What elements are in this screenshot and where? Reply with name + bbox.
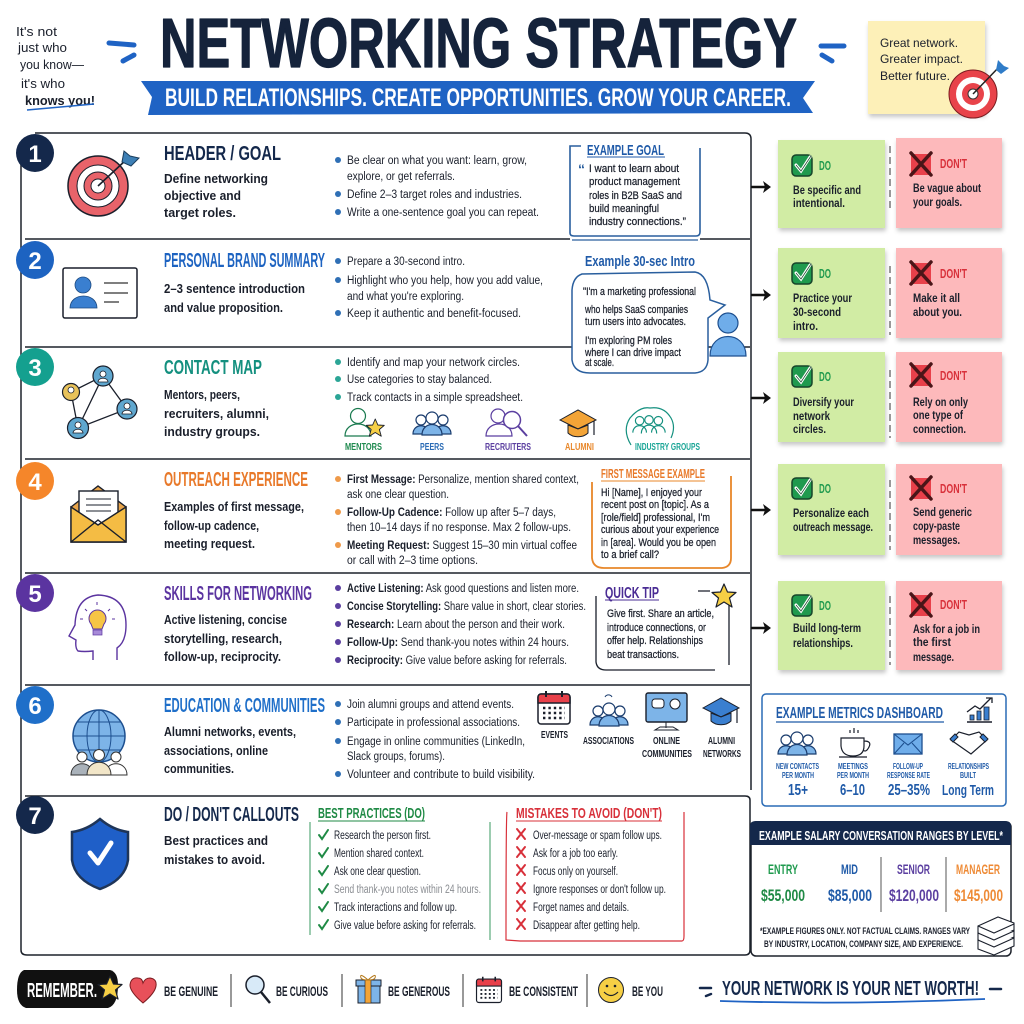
number 5 (16, 574, 54, 612)
do card 1: DO (819, 158, 831, 173)
badge: REMEMBER. (27, 980, 97, 1002)
recruiters (485, 409, 531, 453)
description: storytelling, research, (164, 631, 282, 646)
bullet list: and what you're exploring. (347, 291, 464, 303)
do card 4: Personalize each (793, 508, 869, 520)
icon: shield (72, 819, 128, 889)
metric: new contacts: NEW CONTACTS (776, 762, 819, 771)
bullet list (335, 357, 523, 404)
don't card 4 (896, 464, 1002, 555)
number 6: 6 (28, 693, 42, 720)
description: and value proposition. (164, 300, 283, 315)
icon: network graph (62, 366, 137, 438)
be genuine: BE GENUINE (164, 983, 218, 999)
badge (17, 970, 122, 1008)
panel: 6 education (16, 686, 741, 781)
panel: 7 do dont callouts (16, 796, 684, 941)
industry groups: INDUSTRY GROUPS (635, 442, 700, 453)
do card 3: circles. (793, 424, 826, 436)
mistakes to avoid box: Disappear after getting help. (533, 920, 640, 932)
associations (583, 695, 634, 747)
callout: first message example (592, 466, 731, 568)
mistakes to avoid box: Ask for a job too early. (533, 848, 618, 860)
entry: ENTRY (768, 861, 798, 877)
panel: 4 outreach (16, 462, 731, 568)
best practices list: Ask one clear question. (334, 866, 421, 878)
online communities: ONLINE (653, 736, 680, 747)
bullet list: Join alumni groups and attend events. (347, 699, 514, 711)
metric: meetings: PER MONTH (837, 771, 869, 780)
don't card 3: one type of (913, 410, 963, 422)
senior (889, 861, 939, 905)
callout: quick tip: QUICK TIP (605, 585, 659, 602)
senior: SENIOR (897, 861, 930, 877)
panel: salary ranges (750, 821, 1014, 956)
side note: who knows you (16, 24, 95, 110)
callout: example intro: Example 30-sec Intro (585, 253, 695, 270)
mistakes to avoid box (506, 805, 684, 941)
mid: $85,000 (828, 886, 872, 905)
do card 4: outreach message. (793, 522, 873, 534)
number 1 (16, 134, 54, 172)
description: Best practices and (164, 833, 268, 848)
callout: example goal: industry connections.” (589, 216, 686, 228)
callout: first message example: recent post on [topic]. As a (601, 499, 710, 511)
peers: PEERS (420, 442, 444, 453)
description: mistakes to avoid. (164, 852, 265, 867)
mistakes to avoid box: Ignore responses or don't follow up. (533, 884, 666, 896)
arrows to do and don't cards (752, 146, 890, 665)
be generous (356, 975, 450, 1003)
icon row: community types (538, 691, 741, 760)
description (164, 499, 304, 551)
don't card 5: Ask for a job in (913, 624, 980, 636)
bullet list (335, 155, 539, 219)
sticky note: great network: Better future. (880, 69, 950, 83)
don't card 1: Be vague about (913, 183, 981, 195)
bullet list (335, 256, 543, 320)
do card 3: DO (819, 369, 831, 384)
sticky note: great network: Great network. (880, 36, 958, 50)
subtitle banner (141, 81, 815, 115)
callout: example intro: where I can drive impact (584, 347, 681, 359)
callout: first message example: to a brief call? (601, 549, 659, 561)
callout: first message example: curious about your experience (601, 524, 719, 536)
alumni networks: NETWORKS (703, 749, 741, 760)
sticky note: great network (868, 21, 1009, 118)
callout: example goal: “ (578, 161, 585, 177)
icon: star (712, 584, 736, 607)
be consistent (477, 977, 578, 1002)
heading: PERSONAL BRAND SUMMARY (164, 250, 325, 272)
heading: SKILLS FOR NETWORKING (164, 583, 312, 605)
best practices list: BEST PRACTICES (DO) (318, 805, 425, 822)
description: Define networking (164, 171, 268, 186)
do card 3: Diversify your (793, 397, 854, 409)
description: industry groups. (164, 424, 260, 439)
callout: example goal: product management (589, 176, 680, 188)
metric: meetings (837, 728, 870, 799)
be genuine (130, 978, 218, 1003)
metric: relationships (942, 732, 994, 799)
metric: relationships: Long Term (942, 782, 994, 799)
do card 3 (778, 352, 885, 442)
bullet list: Highlight who you help, how you add value, (347, 275, 543, 287)
metric: follow-up rate (887, 734, 930, 799)
do card 5: relationships. (793, 638, 853, 650)
don't card 2: about you. (913, 307, 962, 319)
callout: example intro: who helps SaaS companies (584, 304, 688, 316)
mistakes to avoid box: Focus only on yourself. (533, 866, 618, 878)
description: communities. (164, 761, 234, 776)
callout: first message example: in [area]. Would you be open (601, 537, 716, 549)
mistakes to avoid box: Forget names and details. (533, 902, 629, 914)
number 7 (16, 796, 54, 834)
number 1: 1 (28, 141, 42, 168)
heading: DO / DON'T CALLOUTS (164, 804, 299, 826)
metric: relationships: RELATIONSHIPS (948, 762, 989, 771)
description: target roles. (164, 205, 236, 220)
description: recruiters, alumni, (164, 406, 269, 421)
bullet list: Follow-Up: Send thank-you notes within 24 hours. (347, 637, 569, 649)
best practices list: Track interactions and follow up. (334, 902, 457, 914)
do card 2: intro. (793, 321, 818, 333)
metric: meetings: 6–10 (840, 782, 865, 799)
do card 2 (778, 248, 885, 338)
bullet list: or call with 2–3 time options. (347, 555, 478, 567)
bullet list: Be clear on what you want: learn, grow, (347, 155, 527, 167)
callout: example intro (572, 253, 746, 373)
do card 2: DO (819, 266, 831, 281)
sticky note: great network: Greater impact. (880, 52, 963, 66)
be generous: BE GENEROUS (388, 983, 450, 999)
recruiters: RECRUITERS (485, 442, 531, 453)
description (164, 724, 296, 776)
do card 1 (778, 140, 885, 228)
description: meeting request. (164, 536, 255, 551)
description: objective and (164, 188, 241, 203)
side note: who knows you: It's not (16, 24, 57, 39)
bullet list (335, 699, 535, 781)
alumni networks (703, 698, 741, 760)
bullet list: Participate in professional associations. (347, 717, 520, 729)
do card 1: Be specific and (793, 185, 861, 197)
description: associations, online (164, 743, 268, 758)
bullet list: Slack groups, forums). (347, 751, 445, 763)
number 5: 5 (28, 581, 42, 608)
callout: example goal: EXAMPLE GOAL (587, 142, 664, 159)
panel: 2 personal brand (16, 241, 746, 373)
mid (828, 861, 872, 905)
be you: BE YOU (632, 983, 663, 999)
bullet list: Research: Learn about the person and their work. (347, 619, 565, 631)
bullet list: Active Listening: Ask good questions and listen more. (347, 583, 579, 595)
bullet list: Engage in online communities (LinkedIn, (347, 736, 525, 748)
be curious (246, 976, 328, 1003)
don't card 5 (896, 581, 1002, 670)
do card 5 (778, 581, 885, 670)
don't card 5: message. (913, 652, 954, 664)
bullet list: Volunteer and contribute to build visibility. (347, 769, 535, 781)
bullet list: Meeting Request: Suggest 15–30 min virtual coffee (347, 540, 577, 552)
do card 4 (778, 464, 885, 555)
don't card 4: Send generic (913, 507, 972, 519)
best practices list: Mention shared context. (334, 848, 424, 860)
don't card 4: copy-paste (913, 521, 960, 533)
icon: cash stack (978, 917, 1014, 955)
bullet list: Reciprocity: Give value before asking for referrals. (347, 655, 567, 667)
mistakes to avoid box: MISTAKES TO AVOID (DON'T) (516, 805, 662, 822)
heading: CONTACT MAP (164, 357, 262, 379)
description (164, 387, 269, 439)
manager (954, 861, 1003, 905)
callout: example intro: turn users into advocates. (585, 316, 686, 328)
do card 4: DO (819, 481, 831, 496)
bullet list: Follow-Up Cadence: Follow up after 5–7 days, (347, 507, 556, 519)
callout: first message example: [role/field] professional, I'm (601, 512, 710, 524)
callout: example goal (570, 142, 700, 240)
don't card 5: the first (913, 637, 951, 649)
be curious: BE CURIOUS (276, 983, 328, 999)
bullet list (335, 474, 579, 567)
bullet list: Use categories to stay balanced. (347, 374, 492, 386)
metric: relationships: BUILT (960, 771, 976, 780)
icon: envelope (71, 486, 126, 542)
be you (598, 978, 663, 1002)
best practices list: Send thank-you notes within 24 hours. (334, 884, 481, 896)
do card 3: network (793, 411, 831, 423)
icon row: contact categories (345, 408, 700, 453)
number 6 (16, 686, 54, 724)
do card 5: DO (819, 598, 831, 613)
metric: follow-up rate: RESPONSE RATE (887, 771, 930, 780)
don't card 1: your goals. (913, 197, 962, 209)
number 4: 4 (28, 469, 42, 496)
bullet list: Prepare a 30-second intro. (347, 256, 465, 268)
callout: example intro: at scale. (585, 357, 614, 369)
callout: quick tip: beat transactions. (607, 649, 679, 661)
bullet list: Define 2–3 target roles and industries. (347, 189, 522, 201)
metric: follow-up rate: FOLLOW-UP (893, 762, 923, 771)
panel: 1 header goal (16, 134, 700, 240)
don't card 3: Rely on only (913, 397, 968, 409)
mentors: MENTORS (345, 442, 382, 453)
industry groups (626, 408, 700, 453)
callout: first message example: FIRST MESSAGE EXAMPLE (601, 466, 705, 481)
icon: growth chart (967, 698, 992, 722)
number 3: 3 (28, 355, 42, 382)
heading: OUTREACH EXPERIENCE (164, 469, 308, 491)
icon: head with bulb (69, 595, 126, 660)
description: Active listening, concise (164, 612, 287, 627)
number 2 (16, 241, 54, 279)
side note: who knows you: just who (17, 40, 67, 55)
callout: quick tip (596, 584, 736, 670)
callout: example goal: build meaningful (589, 203, 659, 215)
do card 2: Practice your (793, 293, 852, 305)
don't card 4: DON'T (940, 481, 967, 496)
footer: remember (17, 970, 663, 1008)
title: NETWORKING STRATEGY (160, 4, 797, 82)
icon: globe with people (71, 710, 127, 775)
bullet list: explore, or get referrals. (347, 171, 455, 183)
associations: ASSOCIATIONS (583, 736, 634, 747)
number 2: 2 (28, 248, 42, 275)
icon: person (710, 313, 746, 356)
description: Alumni networks, events, (164, 724, 296, 739)
description (164, 171, 268, 220)
callout: quick tip: offer help. Relationships (607, 635, 703, 647)
description: Mentors, peers, (164, 387, 240, 402)
header bar (750, 821, 1011, 845)
alumni (560, 410, 596, 453)
panel: step frame (21, 133, 751, 955)
callout: quick tip: Give first. Share an article, (607, 608, 714, 620)
mid: MID (841, 861, 858, 877)
heading: EDUCATION & COMMUNITIES (164, 695, 325, 717)
description: Examples of first message, (164, 499, 304, 514)
bullet list: Concise Storytelling: Share value in short, clear stories. (347, 601, 586, 613)
do card 2: 30-second (793, 307, 841, 319)
online communities (642, 693, 692, 760)
manager: $145,000 (954, 886, 1003, 905)
metric: new contacts (776, 732, 819, 799)
callout: quick tip: introduce connections, or (607, 622, 706, 634)
mistakes to avoid box: Over-message or spam follow ups. (533, 830, 662, 842)
side note: who knows you: it's who (21, 76, 65, 91)
icon: small target (949, 60, 1009, 118)
don't card 2: DON'T (940, 266, 967, 281)
description (164, 833, 268, 867)
events: EVENTS (541, 730, 568, 741)
bullet list: Keep it authentic and benefit-focused. (347, 308, 521, 320)
description (164, 612, 287, 664)
metric: follow-up rate: 25–35% (888, 782, 930, 799)
panel: 5 skills (16, 574, 736, 670)
peers (413, 412, 451, 453)
bullet list: Track contacts in a simple spreadsheet. (347, 392, 523, 404)
entry (761, 861, 805, 905)
description: 2–3 sentence introduction (164, 281, 305, 296)
metric: meetings: MEETINGS (838, 762, 868, 771)
mentors (345, 408, 384, 453)
icon: id card (63, 268, 137, 318)
do card 1: intentional. (793, 198, 845, 210)
best practices list: Give value before asking for referrals. (334, 920, 476, 932)
don't card 2 (896, 248, 1002, 338)
number 7: 7 (28, 803, 42, 830)
side note: who knows you: you know— (20, 57, 84, 72)
number 4 (16, 462, 54, 500)
bullet list: Write a one-sentence goal you can repeat. (347, 207, 539, 219)
callout: example goal: roles in B2B SaaS and (589, 190, 682, 202)
senior: $120,000 (889, 886, 939, 905)
number 3 (16, 348, 54, 386)
don't card 5: DON'T (940, 597, 967, 612)
bullet list: ask one clear question. (347, 489, 449, 501)
best practices list: Research the person first. (334, 830, 431, 842)
don't card 4: messages. (913, 535, 960, 547)
callout: example intro: "I'm a marketing professional (583, 286, 696, 298)
callout: example intro: I'm exploring PM roles (585, 335, 672, 347)
description (164, 281, 305, 315)
callout: example goal: I want to learn about (589, 163, 679, 175)
description: follow-up cadence, (164, 518, 259, 533)
bullet list: Identify and map your network circles. (347, 357, 520, 369)
events (538, 691, 570, 741)
entry: $55,000 (761, 886, 805, 905)
be consistent: BE CONSISTENT (509, 983, 578, 999)
metric: new contacts: PER MONTH (782, 771, 814, 780)
don't card 3: DON'T (940, 368, 967, 383)
metric: new contacts: 15+ (788, 782, 808, 799)
bullet list: First Message: Personalize, mention shared context, (347, 474, 579, 486)
do card 5: Build long-term (793, 623, 861, 635)
alumni networks: ALUMNI (708, 736, 735, 747)
description: follow-up, reciprocity. (164, 649, 281, 664)
best practices list (310, 805, 490, 940)
title accent marks (109, 43, 844, 61)
alumni: ALUMNI (565, 442, 594, 453)
online communities: COMMUNITIES (642, 749, 692, 760)
don't card 3: connection. (913, 424, 966, 436)
heading: HEADER / GOAL (164, 143, 281, 165)
panel: metrics dashboard (762, 694, 1006, 806)
icon: target (68, 151, 139, 216)
don't card 1: DON'T (940, 156, 967, 171)
don't card 2: Make it all (913, 293, 960, 305)
bullet list (335, 583, 586, 667)
panel: 3 contact map (16, 348, 700, 453)
bullet list: then 10–14 days if no response. Max 2 follow-ups. (347, 522, 571, 534)
don't card 3 (896, 352, 1002, 442)
don't card 1 (896, 138, 1002, 228)
callout: first message example: Hi [Name], I enjoyed your (601, 487, 702, 499)
footnote (760, 926, 970, 949)
side note: who knows you: knows you! (25, 93, 95, 108)
